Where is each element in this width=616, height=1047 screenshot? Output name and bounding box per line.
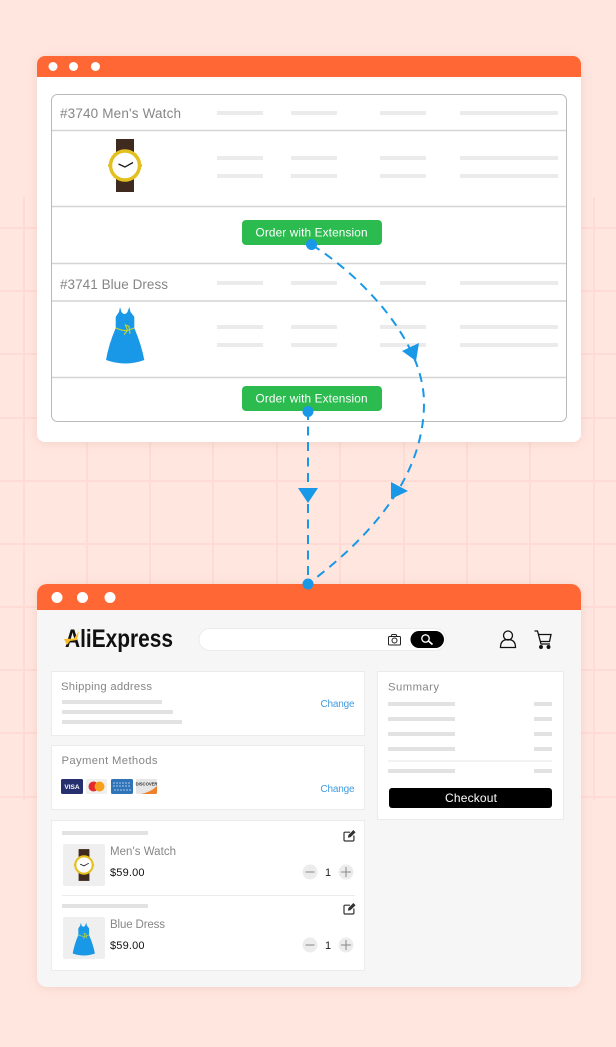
quantity stepper <box>302 938 354 952</box>
item: watch <box>62 830 356 886</box>
search button <box>410 631 444 648</box>
edit icon <box>344 903 356 914</box>
window dots <box>48 62 100 71</box>
summary heading: Summary <box>388 682 439 694</box>
icon: mastercard <box>86 779 107 794</box>
panel: payment methods <box>52 746 364 810</box>
arrow: watch order to checkout <box>306 239 424 584</box>
window body <box>37 56 581 442</box>
icon: camera <box>388 634 400 645</box>
quantity stepper: 1 <box>325 940 331 952</box>
payment change link: Change <box>320 784 355 795</box>
shipping lines <box>62 700 182 724</box>
icon: dress <box>106 307 144 364</box>
button: order dress <box>242 386 382 411</box>
checkout button: Checkout <box>445 791 498 805</box>
item price: $59.00 <box>110 940 144 952</box>
checkout button <box>389 788 552 808</box>
panel: summary <box>378 672 564 820</box>
item price: $59.00 <box>110 867 144 879</box>
orders table <box>52 94 566 422</box>
button: order watch <box>242 220 382 245</box>
panel: order list window <box>37 56 581 442</box>
item name: Men's Watch <box>110 846 176 858</box>
icon: magnifier <box>422 635 432 644</box>
quantity stepper: 1 <box>325 867 331 879</box>
order heading: watch: #3740 Men's Watch <box>60 106 181 121</box>
thumbnail <box>63 917 105 959</box>
checkout dots <box>52 592 116 603</box>
icon: cart <box>534 631 551 648</box>
search bar <box>199 628 446 650</box>
edit icon <box>344 830 356 841</box>
button: order watch: Order with Extension <box>256 226 368 240</box>
icon: watch <box>108 139 142 192</box>
item name: Blue Dress <box>110 919 165 931</box>
icon: user <box>500 631 516 648</box>
shipping change link: Change <box>320 699 355 710</box>
background grid <box>0 197 616 800</box>
button: order dress: Order with Extension <box>256 392 368 406</box>
panel: checkout window <box>37 584 581 987</box>
checkout title bar <box>37 584 581 610</box>
logo: AliExpress: AliExpress <box>65 625 173 653</box>
panel: cart items <box>52 820 364 970</box>
icon: visa: VISA <box>64 784 80 791</box>
shipping heading: Shipping address <box>61 681 152 693</box>
icon: discover: DISCOVER <box>136 782 157 786</box>
placeholder bars <box>217 111 558 347</box>
item: dress <box>62 903 356 959</box>
payment heading: Payment Methods <box>62 755 158 767</box>
summary lines <box>388 702 552 773</box>
order heading: dress: #3741 Blue Dress <box>60 277 168 292</box>
quantity stepper <box>302 864 354 880</box>
arrow: dress order to checkout <box>298 406 318 590</box>
icon: amex <box>111 779 133 794</box>
card icons <box>61 779 157 794</box>
checkout body <box>37 584 581 987</box>
window title bar <box>37 56 581 77</box>
panel: shipping address <box>52 672 364 736</box>
thumbnail <box>63 844 105 886</box>
